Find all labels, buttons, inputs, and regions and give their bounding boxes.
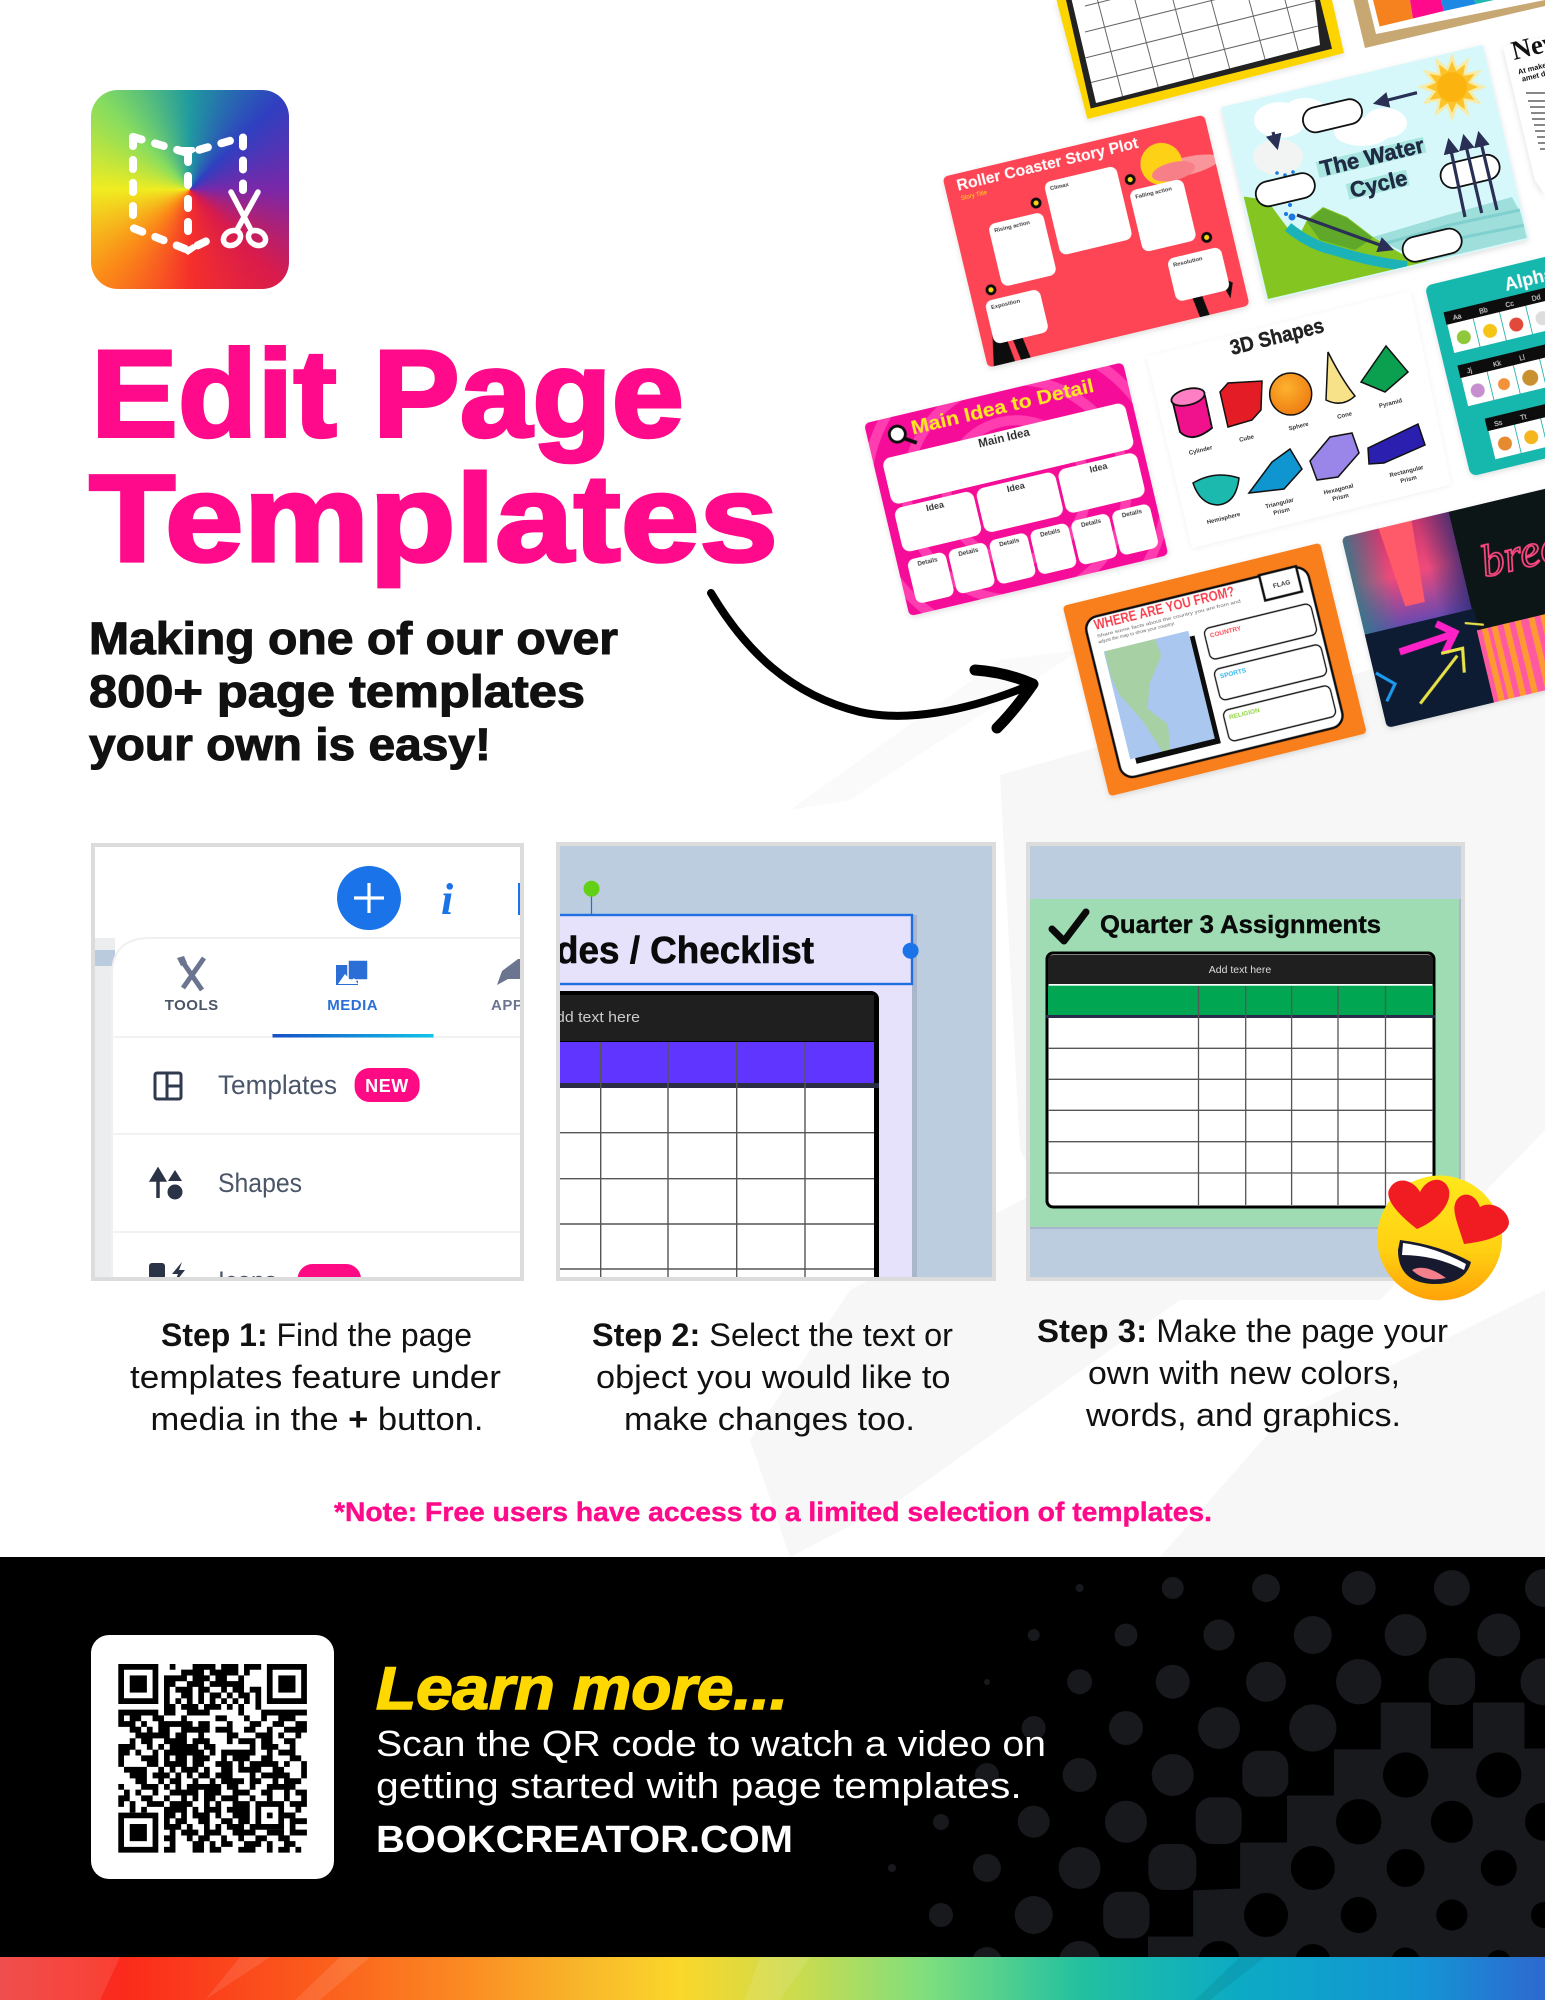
step 3 caption: Step 3: Make the page your bbox=[1037, 1313, 1448, 1349]
template card: 3D shapes: Prism bbox=[1332, 493, 1350, 503]
template card: main idea to detail: Idea bbox=[925, 499, 946, 513]
template card: alphabet: Jj bbox=[1466, 367, 1473, 375]
template card: cork colour board bbox=[1353, 0, 1545, 48]
template card: main idea to detail: Main Idea bbox=[977, 427, 1032, 451]
panel: step 3 screenshot bbox=[1028, 844, 1463, 1279]
template card: roller coaster story plot: Resolution bbox=[1173, 256, 1204, 269]
shape: hexagonal prism bbox=[1310, 433, 1359, 480]
selected heading: des / Checklist bbox=[556, 930, 814, 972]
arrow pointing to templates bbox=[711, 593, 1033, 728]
selected heading bbox=[540, 881, 919, 984]
icon: checkmark bbox=[1052, 912, 1086, 941]
tab: apps: APPS bbox=[491, 997, 534, 1014]
learn more description: Scan the QR code to watch a video on bbox=[376, 1723, 1046, 1764]
step 2 caption: Step 2: Select the text or bbox=[592, 1317, 953, 1353]
template card: main idea to detail: Details bbox=[958, 547, 980, 558]
tab: apps bbox=[491, 959, 520, 1010]
icon: heart-eyes emoji bbox=[1377, 1176, 1509, 1300]
template card: roller coaster story plot: Story Title bbox=[960, 190, 988, 202]
template card: roller coaster story plot: Falling action bbox=[1135, 186, 1173, 201]
subheading: Making one of our over bbox=[89, 613, 618, 664]
subheading bbox=[89, 613, 618, 770]
panel: step 1 screenshot bbox=[93, 845, 534, 1298]
template card: where are you from: RELIGION bbox=[1228, 707, 1261, 721]
template card: main idea to detail: Details bbox=[1121, 508, 1143, 520]
template card: where are you from bbox=[1063, 543, 1367, 796]
icon: info: i bbox=[441, 875, 454, 924]
template card: where are you from: Share some facts about the country you are from and bbox=[1096, 598, 1242, 640]
learn more description bbox=[376, 1723, 1046, 1806]
template card: roller coaster story plot: Exposition bbox=[991, 298, 1021, 311]
template card: 3D shapes: 3D Shapes bbox=[1228, 314, 1326, 360]
title: Edit Page bbox=[91, 325, 684, 463]
tab: media bbox=[328, 960, 378, 1010]
heading: Quarter 3 Assignments bbox=[1100, 911, 1381, 939]
step 2 caption bbox=[592, 1317, 953, 1437]
template card: water cycle: Cycle bbox=[1347, 165, 1410, 203]
subheading: your own is easy! bbox=[89, 719, 491, 770]
rainbow bar bbox=[0, 1957, 1545, 2000]
template card: water cycle bbox=[1223, 47, 1535, 305]
checklist table bbox=[560, 991, 879, 1277]
template card: alphabet bbox=[1425, 232, 1545, 477]
step 1 caption: media in the + button. bbox=[150, 1401, 484, 1437]
row: shapes bbox=[152, 1168, 302, 1200]
learn more heading: Learn more... bbox=[376, 1655, 788, 1722]
template card: 3D shapes bbox=[1147, 291, 1451, 548]
template card: 3D shapes: Triangular bbox=[1265, 497, 1295, 510]
step 3 caption: own with new colors, bbox=[1088, 1355, 1400, 1391]
shape: sphere bbox=[1270, 373, 1312, 415]
icon: add button bbox=[337, 866, 401, 930]
tab: tools bbox=[165, 956, 219, 1014]
template card: where are you from: adjust the map to show your country! bbox=[1098, 621, 1175, 645]
step 2 caption: object you would like to bbox=[596, 1359, 950, 1395]
template card: main idea to detail: Details bbox=[999, 537, 1021, 549]
assignments table: Add text here bbox=[1209, 964, 1271, 976]
template card: 3D shapes: Cylinder bbox=[1188, 445, 1214, 457]
step 3 caption: words, and graphics. bbox=[1085, 1397, 1401, 1433]
template card: where are you from: COUNTRY bbox=[1209, 625, 1243, 640]
panel: step 2 screenshot bbox=[540, 844, 994, 1291]
template card: where are you from: FLAG bbox=[1272, 579, 1291, 590]
template card: main idea to detail: Details bbox=[917, 556, 939, 568]
row: templates: Templates bbox=[218, 1070, 337, 1100]
template card: 3D shapes: Rectangular bbox=[1389, 465, 1425, 479]
template card: roller coaster story plot: Roller Coaster Story Plot bbox=[955, 135, 1141, 195]
step 1 caption: templates feature under bbox=[130, 1359, 501, 1395]
template card: calendar bbox=[1056, 0, 1344, 119]
template card: where are you from: SPORTS bbox=[1219, 667, 1248, 680]
shape: hemisphere bbox=[1193, 475, 1239, 505]
template card: roller coaster story plot bbox=[942, 114, 1254, 368]
template card: alphabet: Bb bbox=[1479, 307, 1489, 316]
template card: 3D shapes: Sphere bbox=[1288, 421, 1310, 432]
step 1 caption bbox=[130, 1317, 501, 1437]
clouds bbox=[1254, 98, 1407, 146]
template card: alphabet: Aa bbox=[1452, 313, 1462, 322]
hills bbox=[1240, 196, 1432, 305]
template card: neon photo collage bbox=[1342, 461, 1545, 728]
template card: alphabet: Dd bbox=[1531, 294, 1542, 303]
title bbox=[89, 325, 778, 588]
shape: cone bbox=[1326, 352, 1355, 403]
template card: main idea to detail: Main Idea to Detail bbox=[909, 376, 1096, 439]
template card: alphabet: Cc bbox=[1505, 300, 1515, 309]
template card: water cycle: The Water bbox=[1318, 132, 1427, 181]
row: icons bbox=[149, 1262, 361, 1277]
tab: media: MEDIA bbox=[327, 997, 378, 1014]
row: shapes: Shapes bbox=[218, 1168, 302, 1198]
template card: roller coaster story plot: Climax bbox=[1050, 182, 1070, 192]
footer panel bbox=[0, 1557, 1545, 1983]
template card: alphabet: Tt bbox=[1520, 414, 1528, 422]
step 3 caption bbox=[1037, 1313, 1448, 1433]
step 2 caption: make changes too. bbox=[624, 1401, 915, 1437]
subheading: 800+ page templates bbox=[89, 666, 585, 717]
template card: newspaper bbox=[1503, 24, 1545, 195]
template card: main idea to detail bbox=[864, 363, 1169, 618]
template card: 3D shapes: Hemisphere bbox=[1206, 512, 1242, 526]
template card: 3D shapes: Cone bbox=[1337, 411, 1353, 421]
template card: alphabet: Kk bbox=[1493, 360, 1503, 369]
sun bbox=[1417, 52, 1487, 122]
rain bbox=[1275, 170, 1296, 220]
template card: main idea to detail: Details bbox=[1080, 518, 1102, 529]
shape: triangular prism bbox=[1249, 449, 1302, 493]
template card: 3D shapes: Pyramid bbox=[1379, 398, 1403, 410]
shape: cube bbox=[1220, 381, 1262, 427]
assignments table bbox=[1046, 953, 1435, 1207]
template card: alphabet: Ss bbox=[1494, 420, 1504, 428]
sea bbox=[1373, 197, 1535, 265]
shape: pyramid bbox=[1361, 346, 1408, 392]
template card: main idea to detail: Details bbox=[1040, 527, 1061, 539]
step 1 caption: Step 1: Find the page bbox=[161, 1317, 472, 1353]
shape: rectangular prism bbox=[1368, 424, 1425, 464]
template card: roller coaster story plot: Rising action bbox=[994, 220, 1031, 234]
app icon bbox=[91, 90, 289, 289]
row: templates bbox=[155, 1068, 420, 1102]
template card: 3D shapes: Cube bbox=[1239, 434, 1255, 444]
template card: main idea to detail: Idea bbox=[1006, 480, 1027, 494]
row: icons: Icons bbox=[218, 1266, 277, 1296]
tab: tools: TOOLS bbox=[165, 997, 219, 1014]
website: BOOKCREATOR.COM bbox=[376, 1819, 793, 1861]
shape: cylinder bbox=[1170, 385, 1212, 437]
template card: 3D shapes: Prism bbox=[1273, 507, 1291, 517]
halftone dot pattern bbox=[887, 1569, 1545, 1983]
background brush strokes bbox=[750, 620, 1545, 1557]
title: Templates bbox=[89, 450, 778, 588]
QR code card bbox=[91, 1635, 334, 1879]
learn more description: getting started with page templates. bbox=[376, 1765, 1022, 1806]
note: *Note: Free users have access to a limited selection of templates. bbox=[334, 1497, 1212, 1527]
template card: where are you from: WHERE ARE YOU FROM? bbox=[1092, 584, 1236, 634]
template card: main idea to detail: Idea bbox=[1089, 461, 1109, 475]
template card: 3D shapes: Hexagonal bbox=[1323, 483, 1355, 497]
template card: alphabet: Ll bbox=[1519, 354, 1526, 363]
template card: 3D shapes: Prism bbox=[1400, 475, 1418, 485]
checklist table: dd text here bbox=[556, 1010, 640, 1026]
row: templates: NEW bbox=[365, 1076, 409, 1096]
